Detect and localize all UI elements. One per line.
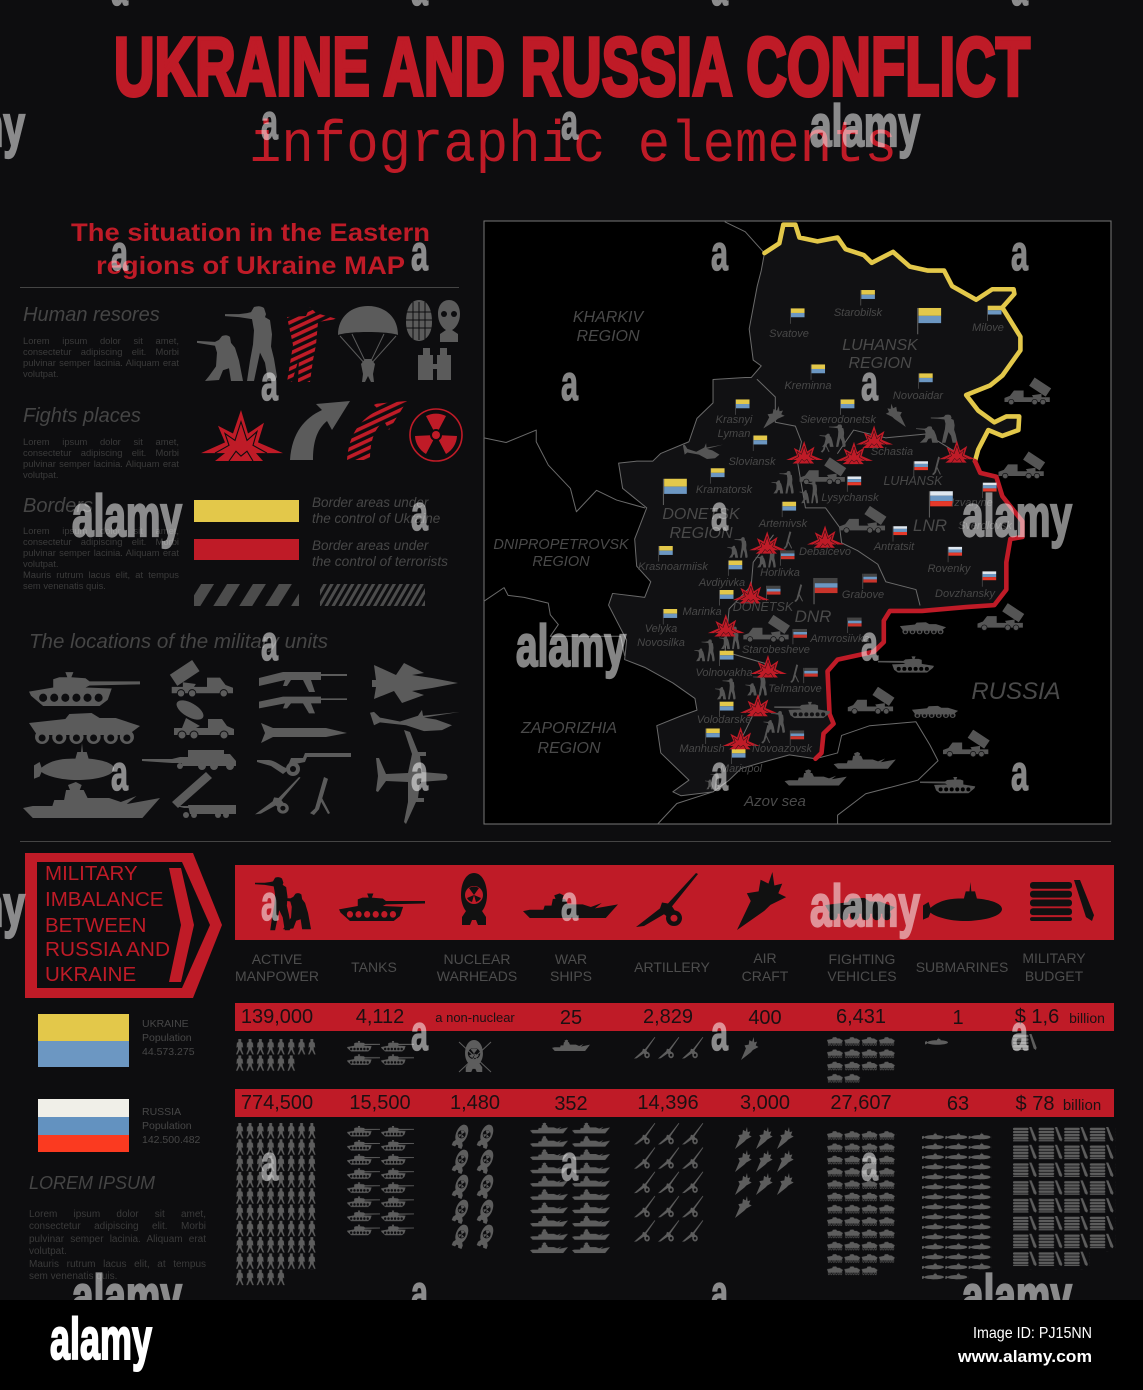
city labels: Sieverodonetsk — [800, 414, 876, 426]
watermarks: a — [411, 1005, 429, 1061]
column headings: MANPOWER — [235, 968, 319, 984]
city labels: DONETSK — [733, 600, 794, 614]
human resources text: consectetur adipiscing elit. Morbi — [23, 346, 179, 357]
LNR flags — [847, 461, 997, 587]
city labels: Volodarske — [697, 714, 751, 726]
Ukraine numbers bar — [235, 1003, 1114, 1031]
watermarks: a — [261, 875, 279, 931]
border swatches: Border areas under — [312, 495, 429, 510]
watermarks: a — [1011, 1005, 1029, 1061]
section heading — [71, 219, 430, 280]
city labels: Grabove — [842, 589, 884, 601]
city labels: Kramatorsk — [696, 484, 753, 496]
lorem ipsum text: consectetur adipiscing elit. Morbi — [29, 1221, 206, 1232]
watermarks: alamy — [810, 94, 920, 159]
column headings: MILITARY — [1022, 950, 1086, 966]
human resources text: Lorem ipsum dolor sit amet, — [23, 335, 179, 346]
border swatches: the control of terrorists — [312, 554, 448, 569]
Russia pictograms — [235, 1122, 1115, 1286]
section heading: The situation in the Eastern — [71, 219, 430, 247]
arrow heading: BETWEEN — [45, 914, 146, 937]
Russia flag and population: Population — [142, 1120, 192, 1132]
watermarks: alamy — [516, 614, 626, 679]
city labels: Starobilsk — [834, 307, 883, 319]
Russia numbers bar: 1,480 — [450, 1092, 500, 1114]
panel: military imbalance — [25, 853, 1115, 1289]
watermarks: a — [561, 355, 579, 411]
city labels: Krasnyi — [716, 414, 753, 426]
watermarks: a — [261, 94, 279, 150]
Ukraine numbers bar: 1 — [952, 1007, 964, 1029]
Ukrainian flags — [658, 290, 1002, 764]
watermarks: a — [411, 225, 429, 281]
region labels: RUSSIA — [971, 678, 1061, 705]
subtitle: infographic elements — [249, 114, 897, 179]
map shapes — [484, 222, 1051, 824]
lorem ipsum text: Lorem ipsum dolor sit amet, — [29, 1209, 206, 1220]
watermarks: a — [411, 745, 429, 801]
city labels: Telmanove — [768, 683, 822, 695]
Ukraine flag and population: UKRAINE — [142, 1018, 189, 1030]
internal and neighbouring boundaries — [484, 222, 958, 824]
occupied Ukraine region — [609, 225, 1022, 796]
watermarks: a — [1011, 745, 1029, 801]
human resources heading: Human resores — [23, 304, 160, 326]
icon band — [235, 865, 1114, 940]
human resources text — [23, 335, 179, 381]
column headings: CRAFT — [742, 968, 789, 984]
city labels: Kreminna — [784, 380, 832, 392]
section heading: regions of Ukraine MAP — [96, 252, 405, 280]
city labels: Schastia — [871, 446, 913, 458]
watermarks: a — [711, 225, 729, 281]
column headings: NUCLEAR — [444, 951, 510, 967]
city labels: Sloviansk — [728, 456, 776, 468]
Ukraine flag and population: 44.573.275 — [142, 1046, 195, 1058]
fights places text: pulvinar semper lacinia. Aliquam erat — [23, 458, 179, 469]
borders text: Mauris rutrum lacus elit, at tempus — [23, 569, 179, 580]
city labels: Avdiyivka — [698, 577, 745, 589]
city labels: Manhush — [679, 743, 725, 755]
fights places heading: Fights places — [23, 405, 141, 427]
Ukraine pictograms — [235, 1034, 1037, 1084]
column headings: WARHEADS — [437, 968, 517, 984]
region labels: REGION — [848, 355, 912, 372]
borders text: pulvinar semper lacinia. Aliquam erat — [23, 547, 179, 558]
Russia numbers bar: 27,607 — [830, 1092, 892, 1114]
Ukraine numbers bar: 6,431 — [836, 1006, 886, 1028]
city labels: Volnovakha — [695, 667, 753, 679]
Russia numbers bar: 774,500 — [241, 1092, 313, 1114]
region labels — [493, 309, 1061, 810]
panel: map — [484, 221, 1111, 824]
city labels: Marinka — [682, 606, 722, 618]
watermarks: a — [711, 745, 729, 801]
column headings — [235, 950, 1086, 984]
arrow heading: MILITARY — [45, 862, 138, 885]
border swatches: the control of Ukraine — [312, 511, 440, 526]
human resources text: pulvinar semper lacinia. Aliquam erat — [23, 357, 179, 368]
city labels: Debalcevo — [799, 546, 851, 558]
lorem ipsum text: volutpat. — [29, 1246, 67, 1257]
column headings: SHIPS — [550, 968, 592, 984]
footer bar — [0, 1300, 1143, 1390]
city labels: Starobesheve — [742, 644, 810, 656]
city labels: Svatove — [769, 328, 809, 340]
military units on the map — [683, 378, 1051, 793]
column headings: VEHICLES — [827, 968, 897, 984]
border swatches: Border areas under — [312, 538, 429, 553]
watermarks: a — [411, 1265, 429, 1321]
watermarks: a — [261, 615, 279, 671]
column headings: ACTIVE — [252, 951, 302, 967]
city labels: Antratsit — [873, 541, 915, 553]
watermarks: alamy — [72, 484, 182, 549]
watermarks: a — [561, 94, 579, 150]
Ukraine numbers bar: 4,112 — [356, 1006, 404, 1028]
region labels: KHARKIV — [573, 309, 644, 326]
Russia numbers bar: 15,500 — [349, 1092, 411, 1114]
region labels: DNR — [795, 607, 831, 626]
watermarks: a — [261, 1135, 279, 1191]
Ukraine numbers bar: 2,829 — [643, 1006, 693, 1028]
Ukraine numbers bar: 139,000 — [241, 1006, 313, 1028]
watermarks: a — [861, 355, 879, 411]
Ukraine numbers bar: 400 — [748, 1007, 782, 1029]
fights places text: volutpat. — [23, 469, 58, 480]
column headings: SUBMARINES — [916, 959, 1008, 975]
region labels: REGION — [532, 554, 590, 570]
Russia numbers bar — [235, 1089, 1114, 1117]
city labels: Lyman — [718, 428, 750, 440]
region labels: DNIPROPETROVSK — [493, 537, 630, 553]
arrow heading: UKRAINE — [45, 963, 136, 986]
footer bar: alamy — [50, 1307, 152, 1372]
Ukraine flag and population: Population — [142, 1032, 192, 1044]
city labels: Novoazovsk — [752, 743, 812, 755]
region labels: REGION — [537, 740, 601, 757]
watermarks: a — [711, 1265, 729, 1321]
fights places icons — [201, 401, 462, 461]
Ukraine numbers bar: billion — [1069, 1010, 1105, 1026]
city labels: Novoaidar — [893, 390, 944, 402]
city labels: Velyka — [645, 623, 677, 635]
borders text: Lorem ipsum dolor sit amet, — [23, 525, 179, 536]
city labels: Novosilka — [637, 637, 685, 649]
watermarks: a — [411, 485, 429, 541]
borders text: consectetur adipiscing elit. Morbi — [23, 536, 179, 547]
Russia numbers bar: 14,396 — [637, 1092, 699, 1114]
fights places text — [23, 436, 179, 482]
city labels: Mariupol — [720, 763, 763, 775]
Ukraine flag and population — [38, 1014, 195, 1067]
Russia flag and population: RUSSIA — [142, 1106, 181, 1118]
Ukraine numbers bar: a non-nuclear — [435, 1010, 515, 1025]
DNR flags — [766, 550, 877, 746]
Ukraine numbers bar: 25 — [560, 1007, 582, 1029]
borders text: sem venenatis quis. — [23, 580, 106, 591]
footer bar: www.alamy.com — [957, 1347, 1092, 1366]
watermarks: a — [861, 615, 879, 671]
watermarks: a — [561, 875, 579, 931]
city labels: Milove — [972, 322, 1004, 334]
border under Ukrainian control — [764, 225, 1020, 461]
region labels: LUHANSK — [842, 337, 919, 354]
watermarks: a — [861, 1135, 879, 1191]
Russia flag and population: 142.500.482 — [142, 1134, 201, 1146]
fights places text: Lorem ipsum dolor sit amet, — [23, 436, 179, 447]
lorem ipsum heading: LOREM IPSUM — [29, 1173, 155, 1193]
watermarks: a — [111, 745, 129, 801]
watermarks: a — [561, 1135, 579, 1191]
borders heading: Borders — [23, 495, 93, 517]
watermarks: a — [711, 485, 729, 541]
Russia flag and population — [38, 1099, 201, 1152]
city labels: Lysychansk — [821, 492, 879, 504]
military units heading: The locations of the military units — [29, 631, 328, 653]
column headings: FIGHTING — [829, 951, 895, 967]
footer bar: Image ID: PJ15NN — [973, 1325, 1092, 1342]
watermarks: alamy — [810, 874, 920, 939]
column headings: TANKS — [351, 959, 397, 975]
city labels: Dovzhansky — [935, 588, 996, 600]
column headings: AIR — [753, 950, 777, 966]
watermarks: alamy — [962, 484, 1072, 549]
Ukraine numbers bar: $ 1,6 — [1015, 1006, 1059, 1028]
watermarks: a — [1011, 225, 1029, 281]
military unit icons — [23, 660, 460, 824]
human resources icons — [197, 300, 460, 382]
border under terrorist control — [815, 461, 1022, 759]
panel: legend — [20, 219, 462, 824]
region labels: REGION — [669, 525, 733, 542]
arrow heading — [25, 853, 222, 998]
region labels: Azov sea — [743, 793, 806, 810]
borders text — [23, 525, 179, 593]
Russia numbers bar: $ 78 — [1016, 1093, 1054, 1115]
region labels: ZAPORIZHIA — [520, 720, 617, 737]
city labels: Amvrosiivka — [809, 633, 870, 645]
region labels: REGION — [576, 328, 640, 345]
city labels: Krasnoarmiisk — [638, 561, 708, 573]
column headings: WAR — [555, 951, 587, 967]
explosions — [708, 425, 976, 749]
column headings: BUDGET — [1025, 968, 1084, 984]
watermarks: a — [111, 225, 129, 281]
city labels: LUHANSK — [883, 474, 943, 488]
Russia numbers bar: 352 — [554, 1093, 588, 1115]
Russia numbers bar: billion — [1063, 1097, 1101, 1114]
lorem ipsum text: sem venenatis quis. — [29, 1271, 117, 1282]
city labels: Rovenky — [928, 563, 972, 575]
city labels: Sverdlovsk — [958, 520, 1012, 532]
fights places text: consectetur adipiscing elit. Morbi — [23, 447, 179, 458]
human resources text: volutpat. — [23, 368, 58, 379]
region labels: LNR — [913, 516, 947, 535]
city labels: Horlivka — [760, 567, 800, 579]
Russia numbers bar: 63 — [947, 1093, 969, 1115]
watermarks: alamy — [962, 1264, 1072, 1329]
Russia numbers bar: 3,000 — [740, 1092, 790, 1114]
arrow heading: IMBALANCE — [45, 888, 163, 911]
watermarks: a — [261, 355, 279, 411]
border swatches — [194, 495, 448, 606]
city labels — [637, 307, 1012, 775]
watermarks: alamy — [72, 1264, 182, 1329]
watermarks: a — [711, 1005, 729, 1061]
column headings: ARTILLERY — [634, 959, 711, 975]
lorem ipsum text — [29, 1209, 206, 1289]
borders text: volutpat. — [23, 558, 58, 569]
city labels: Izvaryne — [951, 497, 993, 509]
region labels: DONETSK — [662, 506, 741, 523]
city labels: Artemivsk — [758, 518, 808, 530]
arrow heading: RUSSIA AND — [45, 938, 170, 961]
lorem ipsum text: Mauris rutrum lacus elit, at tempus — [29, 1259, 206, 1270]
lorem ipsum text: pulvinar semper lacinia. Aliquam erat — [29, 1234, 206, 1245]
